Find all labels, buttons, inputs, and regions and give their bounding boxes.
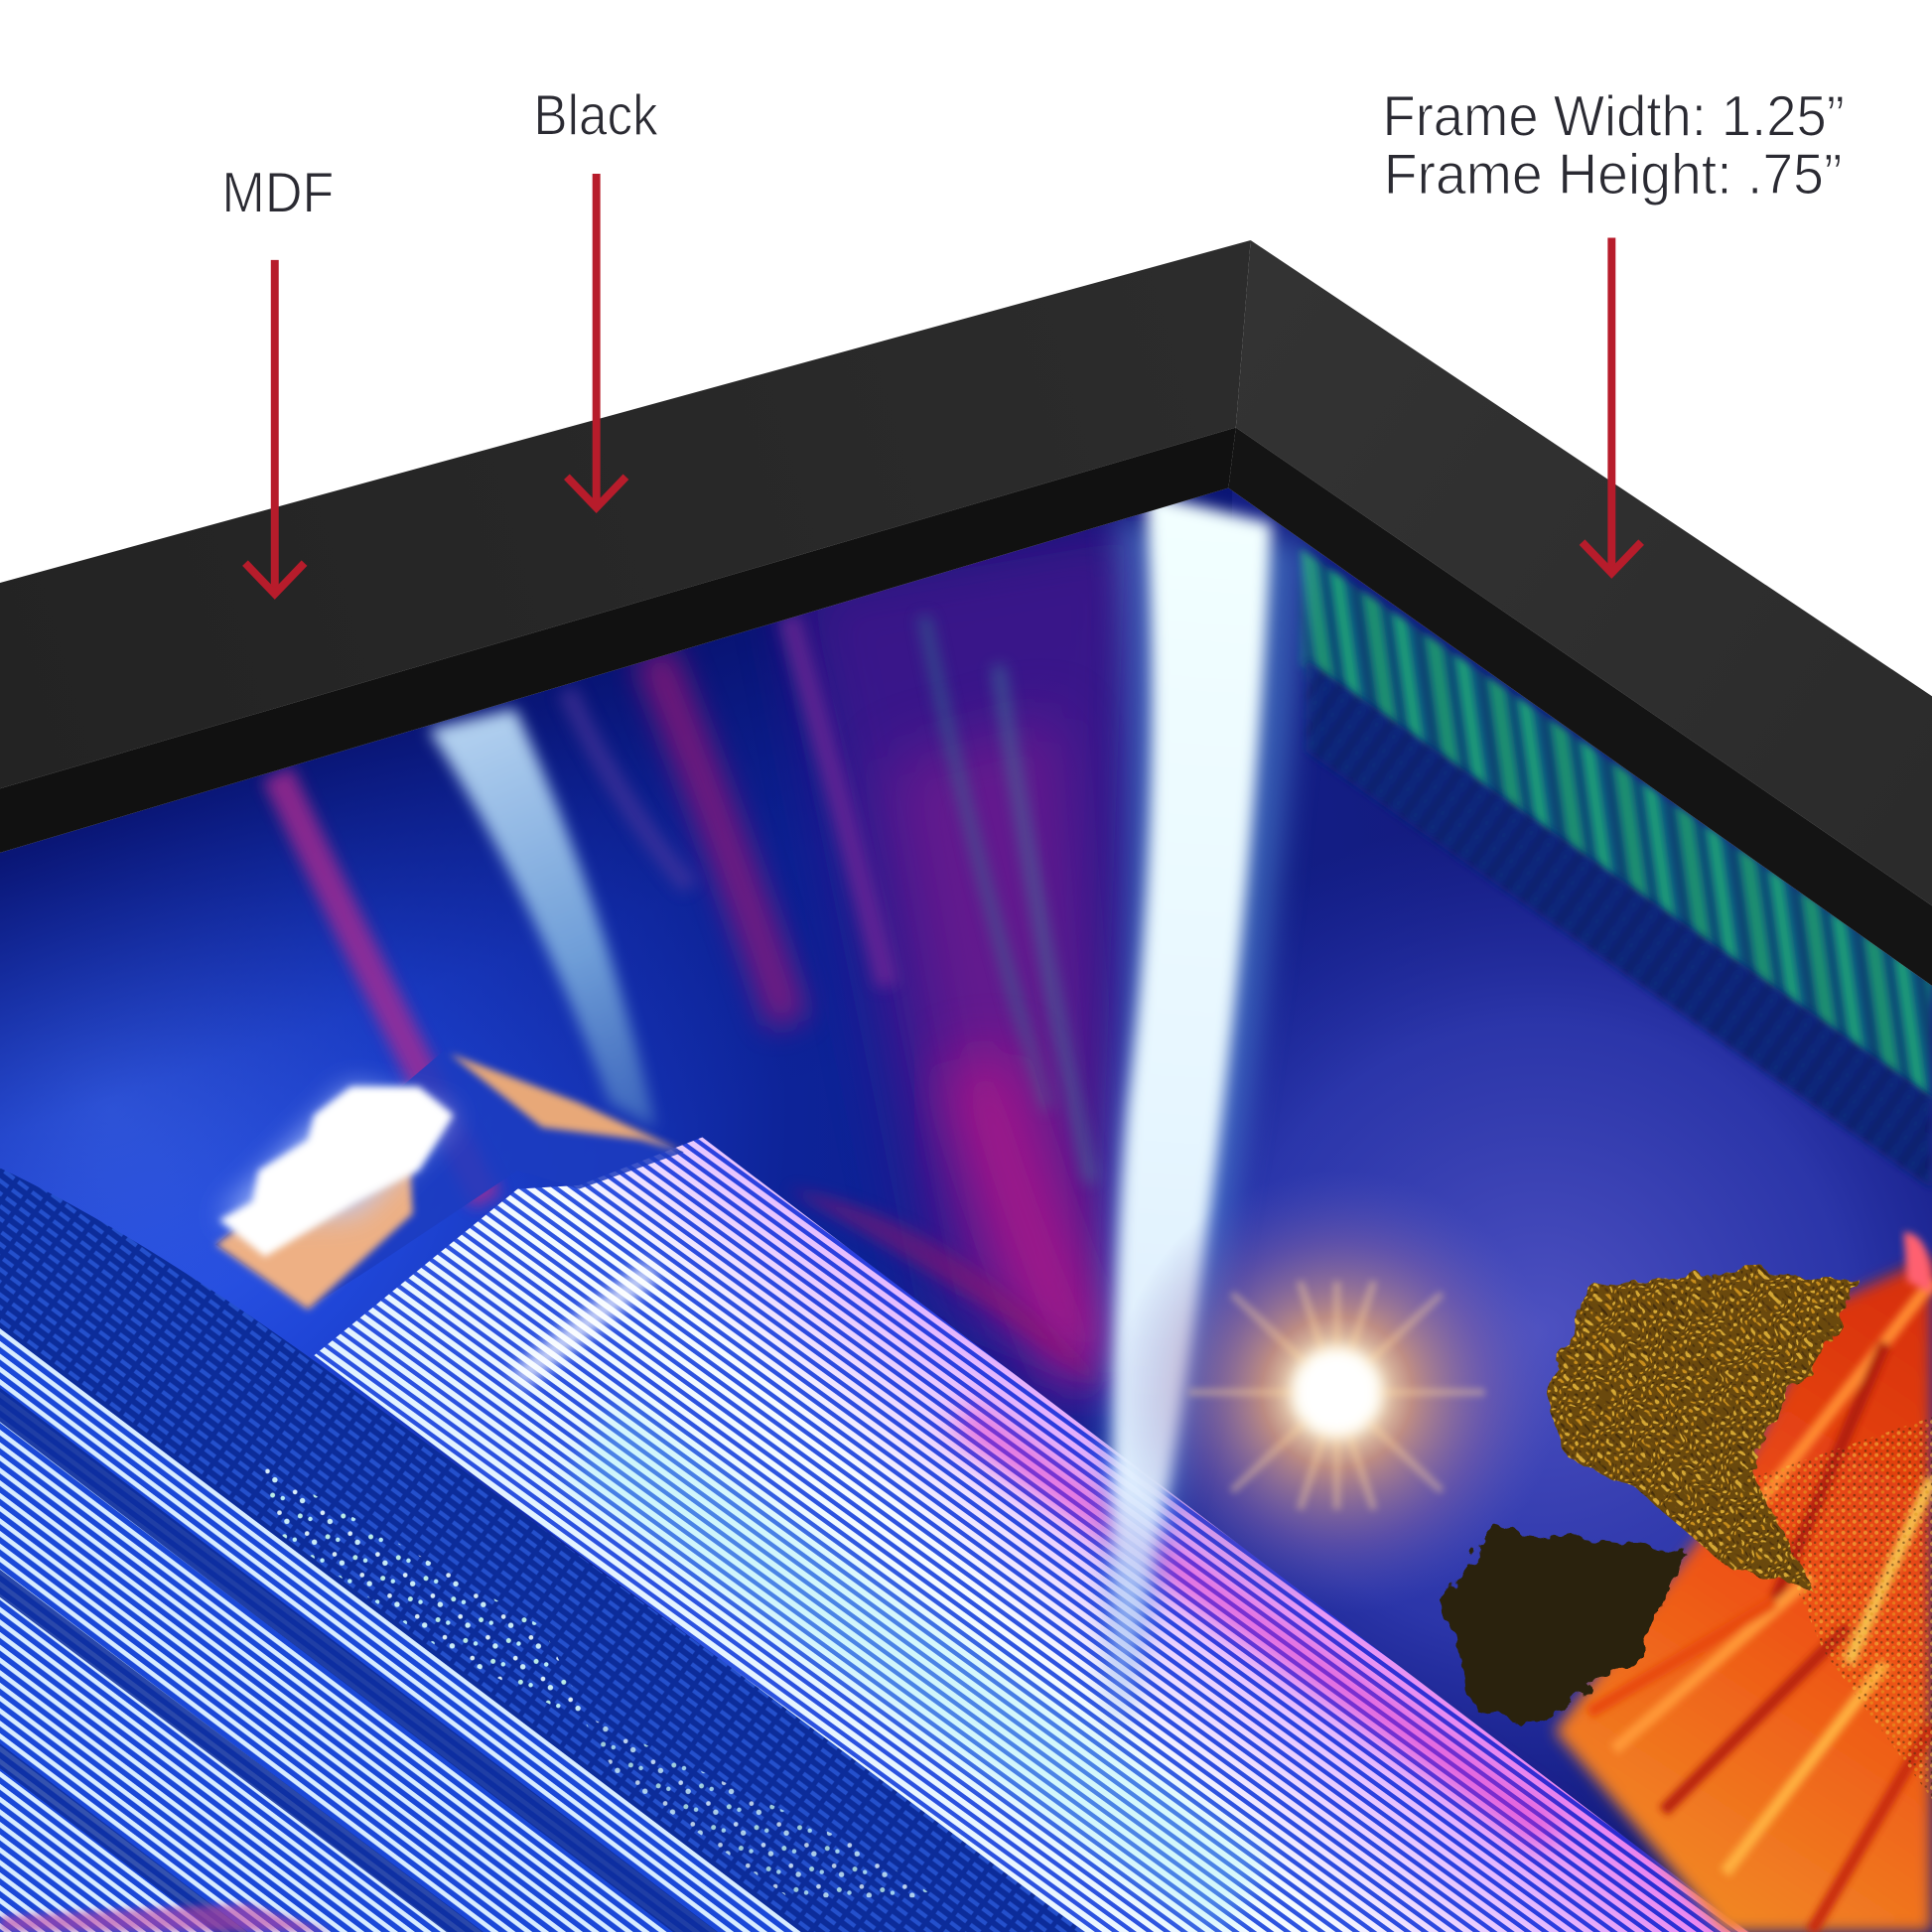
label: frame dimensions	[1382, 85, 1845, 207]
frame face, left rail	[0, 240, 1251, 788]
arrow: frame dimensions	[1583, 238, 1641, 573]
purple and magenta light streaks	[567, 517, 1146, 1386]
frame inner lip, left rail	[0, 428, 1236, 853]
green streak band along the right frame edge	[1300, 548, 1932, 1189]
label: MDF: MDF	[221, 161, 334, 224]
pink specks at the bottom left	[0, 1903, 333, 1932]
building rooftop, glowing white and orange	[215, 1051, 684, 1310]
night sky	[0, 469, 1932, 1932]
speckled golden foliage	[1749, 1417, 1932, 1799]
pale blue curved beam	[429, 709, 655, 1128]
label: Black: Black	[533, 83, 658, 147]
striped lower-left building	[0, 1328, 801, 1932]
main striped skyscraper	[314, 1138, 1749, 1932]
street lamp flare	[1127, 1193, 1530, 1599]
black MDF frame	[0, 240, 1932, 986]
dark tree	[1442, 1528, 1688, 1725]
frame inner lip, right rail	[1228, 428, 1932, 986]
label: frame dimensions: Frame Height: .75”	[1384, 143, 1842, 207]
pink beam on the left	[277, 773, 486, 1201]
arrow: MDF	[245, 260, 305, 594]
label: frame dimensions: Frame Width: 1.25”	[1382, 85, 1845, 149]
arrow: Black	[567, 174, 625, 507]
frame face, right rail	[1236, 240, 1932, 905]
photo print inside the frame	[0, 469, 1932, 1932]
golden tree	[1547, 1269, 1861, 1589]
dark tower on the left	[0, 1169, 1090, 1932]
bright white central beam	[1106, 492, 1307, 1749]
orange light trails, lower right	[1555, 1232, 1932, 1932]
